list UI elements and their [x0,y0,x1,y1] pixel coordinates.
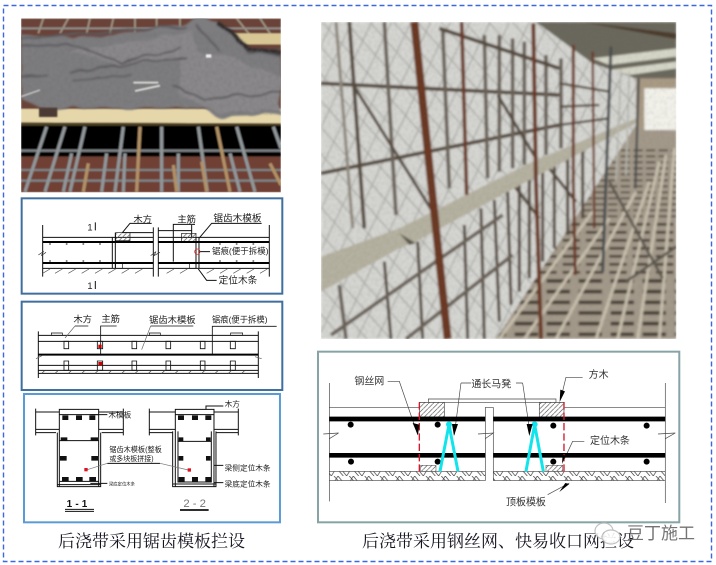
vertical rusty rebars [414,22,594,339]
panel: beam cross sections: 梁底定位木条 [109,480,136,487]
panel: sawtooth section detail [22,198,282,294]
panel: beam cross sections: 2-2 [183,498,206,510]
floor base and ladder rows [496,124,676,339]
panel: sawtooth section detail: 定位木条 [219,274,258,286]
watermark: 豆丁施工 [595,523,695,544]
panel: wire mesh section detail: 方木 [589,368,609,381]
photo: wire mesh and rebar wall [321,22,676,339]
panel: sawtooth elevation detail: 木方 [73,314,92,325]
ceiling [536,22,676,78]
mesh bars on wall [321,22,676,339]
panel: beam cross sections: 锯齿木模板(整板 [109,445,162,454]
panel: sawtooth section detail: 锯齿木模板 [213,213,262,225]
panel: wire mesh section detail: 顶板模板 [506,496,546,509]
panel: beam cross sections: 1-1 [67,499,88,510]
panel: sawtooth elevation detail [22,302,282,390]
far opening [675,80,676,81]
panel: sawtooth section detail: 1 [87,281,93,291]
panel: wire mesh section detail: 钢丝网 [354,375,384,388]
panel: sawtooth section detail: 1 [87,222,93,232]
panel: sawtooth section detail: 主筋 [177,213,196,224]
caption: left column: 后浇带采用锯齿模板拦设 [58,532,245,551]
panel: sawtooth section detail: 木方 [133,213,152,224]
caption: right column: 后浇带采用钢丝网、快易收口网拦设 [362,532,634,551]
photo: felt over sawtooth formwork [21,18,281,192]
icon: chat bubbles [595,523,620,544]
panel: wire mesh section detail: 通长马凳 [471,378,511,390]
wall [321,22,636,339]
panel: sawtooth elevation detail: 主筋 [101,313,120,324]
ledge [321,118,636,292]
panel: beam cross sections: 梁侧定位木条 [225,463,271,473]
panel: beam cross sections: 木方 [225,399,240,409]
panel: beam cross sections: 或多块板拼接) [109,454,154,463]
panel: beam cross sections: 梁底定位木条 [225,479,271,489]
panel: sawtooth elevation detail: 锯齿木模板 [149,314,196,325]
panel: sawtooth elevation detail: 锯痕(便于拆模) [212,315,268,325]
watermark text: 豆丁施工 [627,524,695,543]
panel: wire mesh section detail: 定位木条 [590,434,630,447]
panel: sawtooth section detail: 锯痕(便于拆模) [212,246,269,256]
panel: beam cross sections: 木模板 [108,410,132,420]
panel: wire mesh section detail [318,352,679,522]
panel: beam cross sections [24,394,280,522]
